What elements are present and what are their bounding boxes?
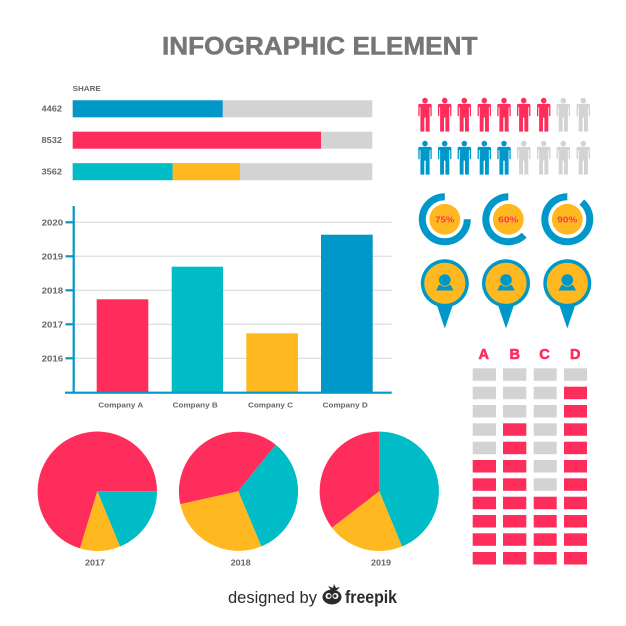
bar row 8532: [42, 132, 372, 149]
pin 2: [482, 259, 530, 328]
year axis labels: [42, 218, 63, 364]
panel: share bars: [42, 84, 372, 180]
company axis labels: Company C: [248, 400, 294, 410]
column headings: D: [570, 347, 581, 363]
chart axes: [65, 206, 392, 393]
footer credit: designed by: [228, 589, 318, 607]
column D blocks: [564, 368, 587, 564]
pin 1: [421, 259, 469, 328]
column B blocks: [503, 368, 526, 564]
bar row 4462: 4462: [42, 104, 62, 114]
pin 3: [543, 259, 591, 328]
year axis labels: 2018: [42, 286, 63, 296]
footer credit: freepik: [345, 587, 397, 607]
bar row 8532: 8532: [42, 135, 62, 145]
pie 2019: 2019: [371, 558, 391, 568]
pie 2017: 2017: [85, 558, 105, 568]
footer credit: [228, 584, 397, 607]
year axis labels: 2016: [42, 354, 63, 364]
bar: Company D: [321, 235, 373, 392]
column A blocks: [473, 368, 496, 564]
icon row: red people, 7 of 9: [418, 98, 590, 132]
column headings: C: [539, 347, 550, 363]
share heading: SHARE: [73, 84, 101, 93]
bar row 3562: [42, 163, 372, 180]
donut 75%: [422, 197, 467, 242]
pie 2018: [179, 432, 298, 568]
title: INFOGRAPHIC ELEMENT: [162, 32, 478, 60]
year axis labels: 2017: [42, 320, 63, 330]
donut 75%: 75%: [435, 214, 455, 224]
donut 90%: [545, 197, 590, 242]
column headings: A: [478, 347, 489, 363]
company axis labels: [98, 400, 368, 410]
column headings: [478, 347, 581, 363]
bar: Company A: [97, 299, 148, 392]
year axis labels: 2019: [42, 252, 63, 262]
panel: pie charts: [38, 432, 439, 568]
pie 2019: [320, 432, 439, 568]
year axis labels: 2020: [42, 218, 63, 228]
company axis labels: Company D: [323, 400, 368, 410]
company axis labels: Company A: [98, 400, 144, 410]
icon: freepik mascot: [322, 584, 342, 604]
column headings: B: [509, 347, 520, 363]
panel: people pictograms: [418, 98, 590, 175]
pie 2017: [38, 432, 157, 568]
icon row: blue people, 5 of 9: [418, 141, 590, 175]
donut 90%: 90%: [557, 214, 578, 224]
bar: Company B: [172, 267, 223, 392]
bar row 4462: [42, 100, 372, 117]
bar chart: [42, 206, 392, 410]
pie 2018: 2018: [231, 558, 251, 568]
column C blocks: [534, 368, 557, 564]
panel: block grid A-D: [473, 347, 587, 564]
company axis labels: Company B: [173, 400, 218, 410]
panel: donut gauges: [422, 197, 590, 242]
donut 60%: [486, 197, 524, 242]
donut 60%: 60%: [498, 214, 519, 224]
bar: Company C: [246, 333, 298, 392]
panel: map pins: [421, 259, 591, 328]
bar row 3562: 3562: [42, 166, 62, 176]
